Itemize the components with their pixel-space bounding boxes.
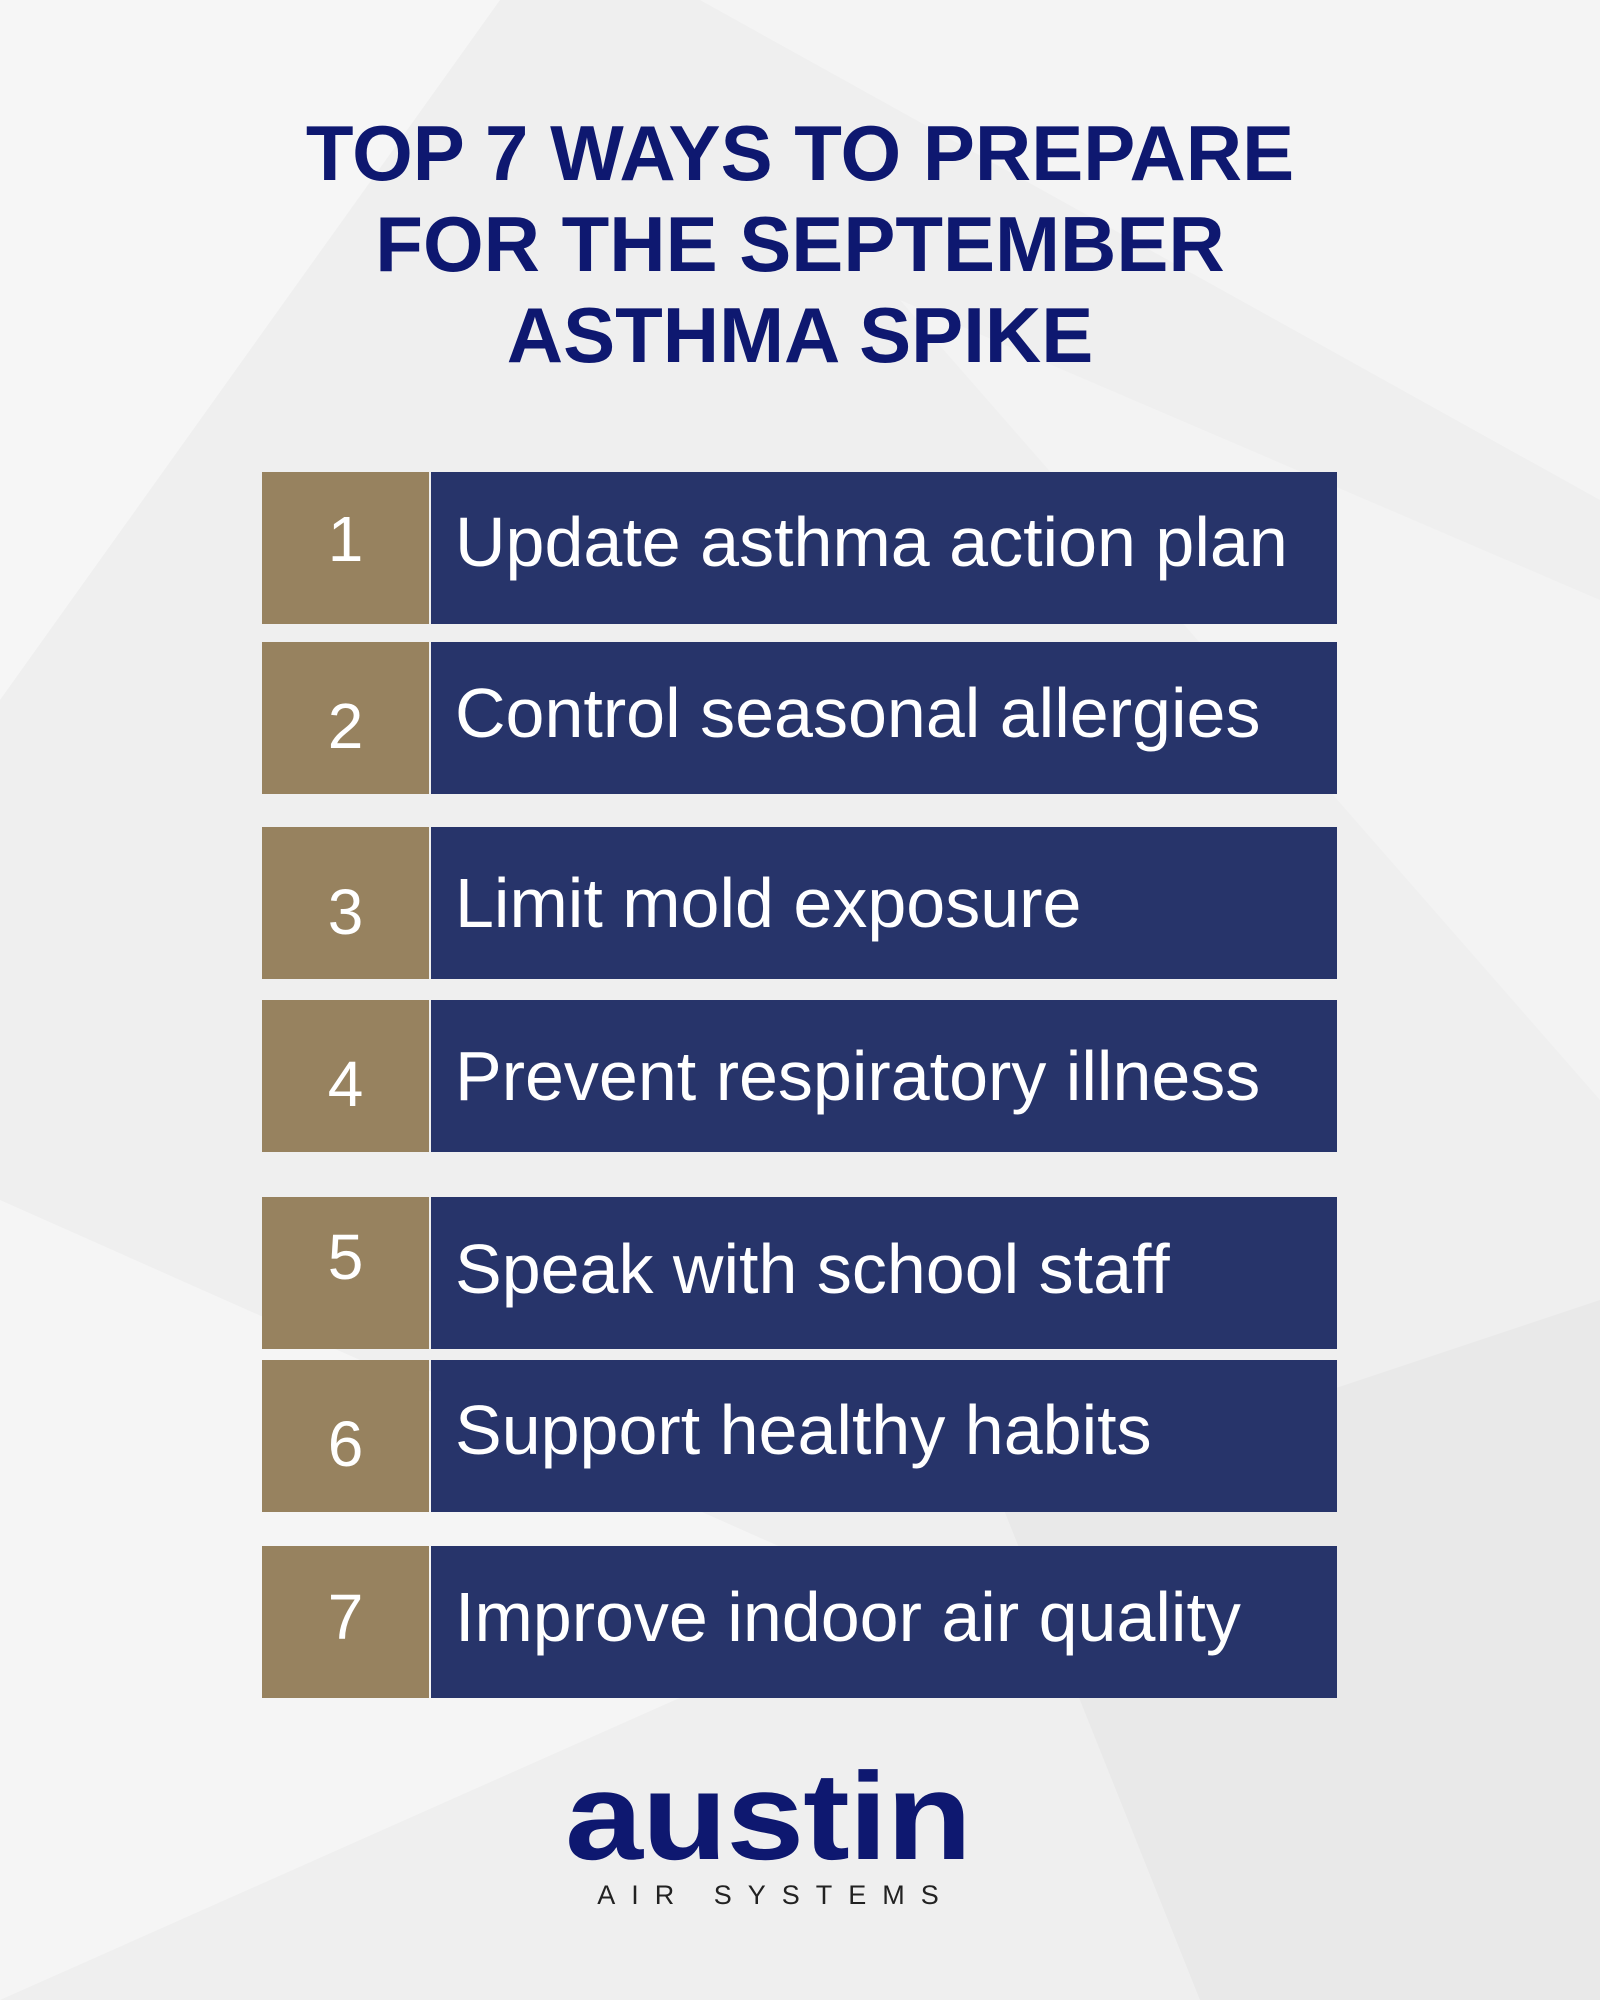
row 7 bbox=[262, 1546, 1337, 1698]
row 7: Improve indoor air quality bbox=[455, 1578, 1241, 1656]
title bbox=[306, 109, 1294, 379]
row 3 bbox=[262, 827, 1337, 979]
row 3: Limit mold exposure bbox=[455, 864, 1081, 942]
row 2: Control seasonal allergies bbox=[455, 674, 1260, 752]
row 1: 1 bbox=[328, 503, 363, 575]
row 2: 2 bbox=[328, 690, 363, 762]
row 2 bbox=[262, 642, 1337, 794]
row 5: 5 bbox=[328, 1221, 363, 1293]
row 6 bbox=[262, 1360, 1337, 1512]
logo: austin bbox=[565, 1748, 971, 1886]
row 6: 6 bbox=[328, 1408, 363, 1480]
row 4: 4 bbox=[328, 1048, 363, 1120]
row 5 bbox=[262, 1197, 1337, 1349]
row 5: Speak with school staff bbox=[455, 1230, 1170, 1308]
logo: AIR SYSTEMS bbox=[597, 1880, 955, 1910]
row 1 bbox=[262, 472, 1337, 624]
row 1: Update asthma action plan bbox=[455, 503, 1288, 581]
row 4 bbox=[262, 1000, 1337, 1152]
row 3: 3 bbox=[328, 876, 363, 948]
title: TOP 7 WAYS TO PREPARE bbox=[306, 109, 1294, 197]
row 6: Support healthy habits bbox=[455, 1391, 1152, 1469]
title: FOR THE SEPTEMBER bbox=[375, 200, 1225, 288]
row 4: Prevent respiratory illness bbox=[455, 1037, 1260, 1115]
row 7: 7 bbox=[328, 1581, 363, 1653]
title: ASTHMA SPIKE bbox=[507, 291, 1093, 379]
